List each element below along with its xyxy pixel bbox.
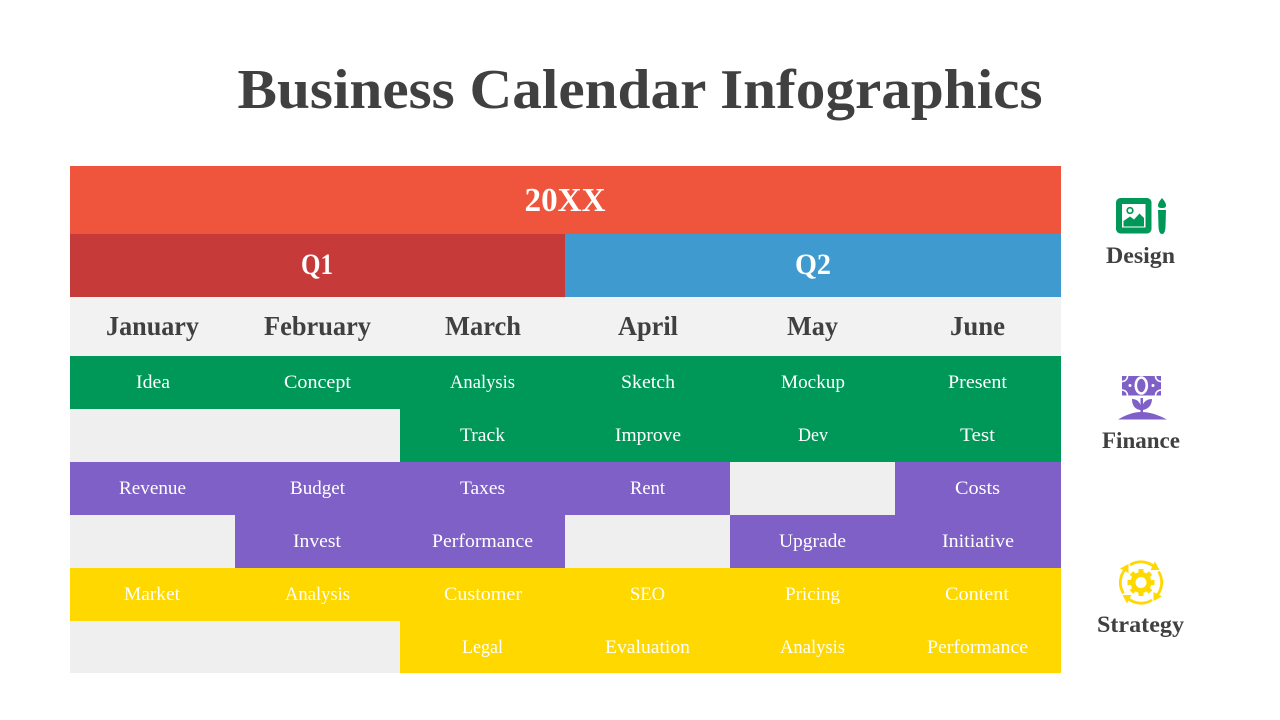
quarter header: Q2 [565,234,1061,297]
design tasks: Mockup [781,372,845,393]
icon: gear with cycle arrows [1120,562,1162,604]
strategy tasks: Legal [462,637,503,658]
design tasks [70,356,1061,462]
design tasks: Present [948,372,1008,393]
finance tasks: Rent [630,478,666,499]
month header row: June [950,311,1005,341]
label: Strategy: Strategy [1097,612,1185,637]
strategy tasks: Content [945,584,1010,605]
icon: money plant [1118,376,1167,420]
quarter header: Q2: Q2 [795,248,831,281]
design tasks: Improve [615,425,681,446]
finance tasks: Revenue [119,478,186,499]
label: Design: Design [1106,243,1175,268]
month header row: January [106,311,199,341]
finance tasks: Upgrade [779,531,846,552]
design tasks: Analysis [450,372,515,393]
strategy tasks: Analysis [780,637,845,658]
title: Business Calendar Infographics [238,59,1042,121]
finance tasks: Costs [955,478,1000,499]
finance tasks: Performance [432,531,533,552]
month header row [70,297,1061,356]
month header row: March [445,311,521,341]
finance tasks: Invest [293,531,342,552]
quarter header: Q1 [70,234,565,297]
design tasks: Test [960,425,996,446]
strategy tasks: Evaluation [605,637,691,658]
finance tasks: Budget [290,478,346,499]
month header row: February [264,311,371,341]
design tasks: Idea [136,372,171,393]
finance tasks [70,462,1061,568]
icon: picture and paintbrush [1116,198,1166,234]
design tasks: Track [460,425,506,446]
legend: finance [1102,376,1180,453]
design tasks: Dev [798,425,828,446]
strategy tasks [70,568,1061,673]
finance tasks: Initiative [942,531,1014,552]
month header row: April [618,311,678,341]
finance tasks: Taxes [460,478,505,499]
quarter header: Q1: Q1 [301,248,333,281]
legend: design [1106,198,1175,268]
year header [70,166,1061,234]
strategy tasks: SEO [630,584,665,605]
label: Finance: Finance [1102,428,1180,453]
year header: 20XX [524,182,606,219]
strategy tasks: Performance [927,637,1028,658]
month header row: May [787,311,838,341]
design tasks: Concept [284,372,352,393]
strategy tasks: Market [124,584,181,605]
design tasks: Sketch [621,372,676,393]
strategy tasks: Analysis [285,584,350,605]
strategy tasks: Customer [444,584,523,605]
strategy tasks: Pricing [785,584,840,605]
legend: strategy [1097,562,1185,637]
calendar table [70,166,1061,673]
